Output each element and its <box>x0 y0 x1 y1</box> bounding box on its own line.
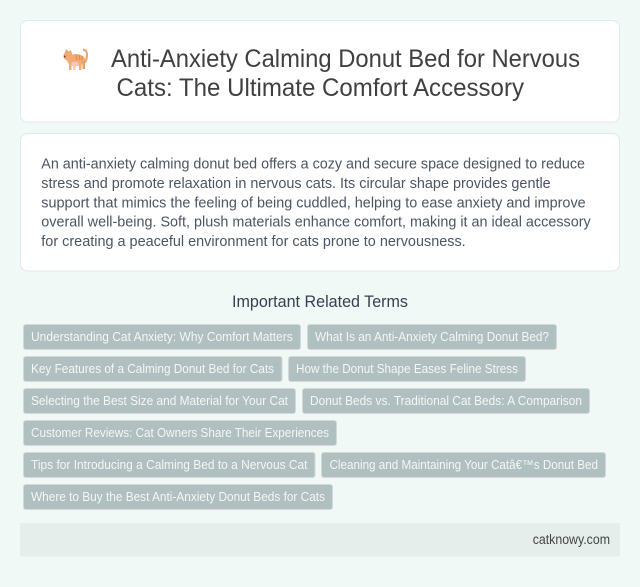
tag: Key Features of a Calming Donut Bed for Cats <box>31 362 274 376</box>
description text: An anti-anxiety calming donut bed offers a cozy and secure space designed to reduce <box>41 155 585 172</box>
footer <box>20 523 620 556</box>
panel: tag list <box>24 324 606 510</box>
panel: header card <box>20 20 620 122</box>
tag <box>24 356 282 382</box>
tag <box>308 324 556 350</box>
description text: stress and promote relaxation in nervous cats. Its circular shape provides gentle <box>41 175 551 192</box>
panel: description card <box>20 134 620 271</box>
tag: Donut Beds vs. Traditional Cat Beds: A Comparison <box>310 394 582 408</box>
tag <box>24 324 300 350</box>
tag: Understanding Cat Anxiety: Why Comfort Matters <box>31 330 293 344</box>
description text: support that mimics the feeling of being cuddled, helping to ease anxiety and improve <box>41 194 586 211</box>
title <box>111 46 580 102</box>
tag <box>24 452 315 478</box>
tag: Tips for Introducing a Calming Bed to a Nervous Cat <box>31 458 308 472</box>
title: Cats: The Ultimate Comfort Accessory <box>116 75 525 102</box>
tag: Cleaning and Maintaining Your Catâ€™s Donut Bed <box>330 458 598 472</box>
icon: orange cat <box>63 49 88 70</box>
tag <box>288 356 526 382</box>
tag <box>24 388 296 414</box>
title: Anti-Anxiety Calming Donut Bed for Nervous <box>111 46 580 73</box>
tag: How the Donut Shape Eases Feline Stress <box>296 362 518 376</box>
tag: What Is an Anti-Anxiety Calming Donut Bed? <box>315 330 549 344</box>
tag <box>302 388 590 414</box>
tag: Customer Reviews: Cat Owners Share Their Experiences <box>31 426 329 440</box>
tag <box>322 452 606 478</box>
tag <box>24 420 336 446</box>
tag: Selecting the Best Size and Material for Your Cat <box>31 394 288 408</box>
heading: important related terms: Important Related Terms <box>232 293 408 311</box>
tag: Where to Buy the Best Anti-Anxiety Donut Beds for Cats <box>31 490 325 504</box>
description text: for creating a peaceful environment for cats prone to nervousness. <box>41 233 466 250</box>
description text: overall well-being. Soft, plush materials enhance comfort, making it an ideal accessory <box>41 214 591 231</box>
tag <box>24 484 332 510</box>
footer site name: catknowy.com <box>533 532 610 547</box>
description text <box>41 155 591 250</box>
